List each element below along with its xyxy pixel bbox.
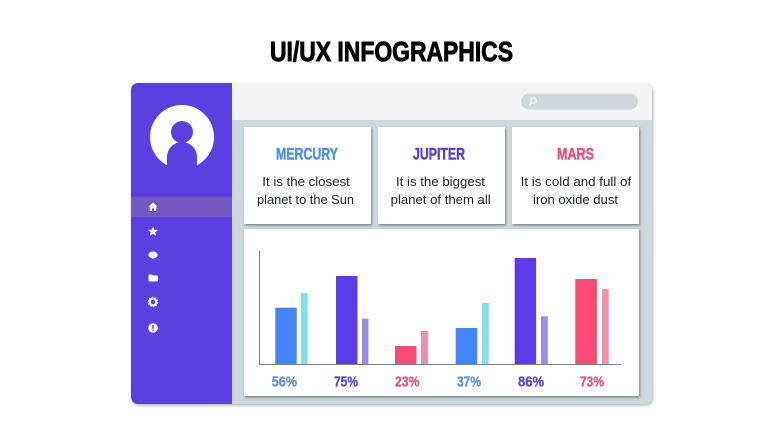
value labels: 75% [334,374,358,391]
active menu item [131,197,232,217]
value labels: 56% [272,374,297,391]
value labels [272,374,604,391]
bars: 75% [336,276,368,364]
value labels: 73% [580,374,604,391]
title: UI/UX INFOGRAPHICS [270,36,513,67]
value labels: 86% [518,374,544,391]
card: Mercury [244,127,371,224]
description: Jupiter: It is the biggest [396,174,485,189]
icon: settings [148,297,158,307]
description: Mercury [257,174,354,207]
icon: alert [148,323,158,333]
description: Mars [521,174,632,207]
icon: star [148,226,158,236]
card: Jupiter [378,127,505,224]
bars: 56% [275,293,308,364]
description: Mercury: It is the closest [262,174,350,189]
description: Mercury: planet to the Sun [257,192,354,207]
value labels: 37% [457,374,481,391]
description: Mars: It is cold and full of [521,174,632,189]
description: Mars: iron oxide dust [533,192,618,207]
sidebar [131,83,232,404]
search box [521,94,638,110]
heading: Mercury: MERCURY [276,144,338,164]
top bar [232,83,652,120]
chart axes [260,251,621,364]
bars: 23% [395,331,428,364]
heading: Jupiter: JUPITER [413,144,465,164]
icon: chat [148,251,158,259]
card: Mars [512,127,639,224]
icon: magnifier [529,98,536,106]
avatar [150,105,214,172]
icon: home [148,202,158,211]
value labels: 23% [395,374,420,391]
bars: 86% [515,258,548,364]
heading: Mars: MARS [557,144,594,164]
bars: 37% [456,303,489,364]
description: Jupiter: planet of them all [391,192,491,207]
icon: folder [148,274,158,282]
bars: 73% [575,279,609,364]
description: Jupiter [391,174,491,207]
panel: bar chart [244,229,639,396]
app window [131,83,652,404]
